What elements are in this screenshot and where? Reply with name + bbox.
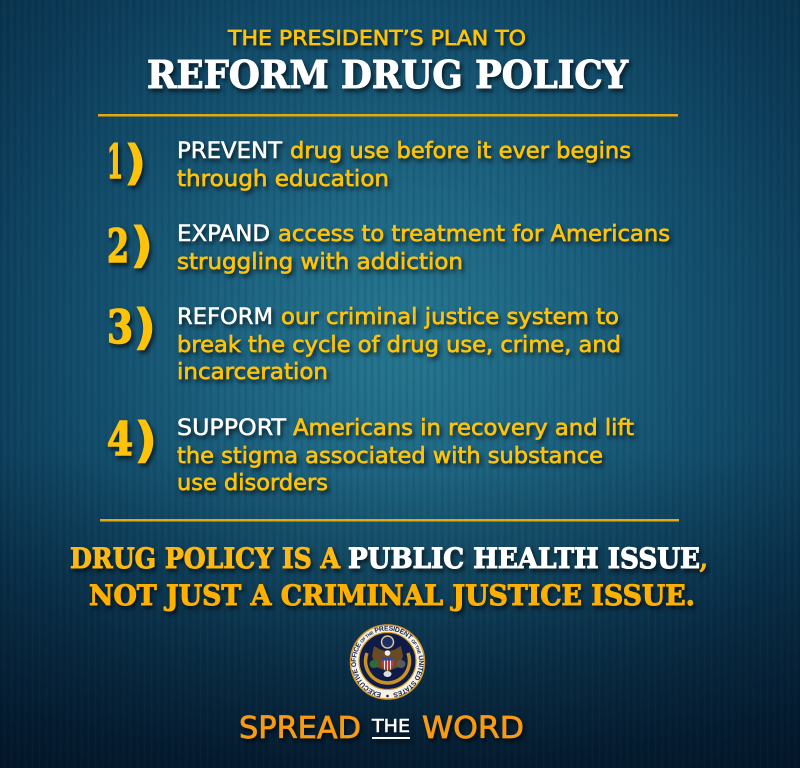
main heading: REFORM DRUG POLICY [147, 52, 629, 97]
item 4: Americans in recovery and lift [293, 415, 634, 441]
item 1: through education [177, 166, 389, 192]
item 4: SUPPORT [177, 415, 286, 441]
closing statement: DRUG POLICY IS A [70, 542, 341, 575]
item 1: drug use before it ever begins [290, 138, 631, 164]
title kicker: THE PRESIDENT’S PLAN TO [227, 26, 526, 50]
item 1: PREVENT [177, 138, 282, 164]
spread the word logo [239, 711, 524, 746]
item 4: the stigma associated with substance [177, 443, 603, 469]
item 1 [107, 135, 631, 192]
item 3: ) [132, 299, 157, 356]
plan list [107, 135, 670, 496]
item 4: use disorders [177, 470, 328, 496]
closing statement: PUBLIC HEALTH ISSUE [348, 542, 700, 575]
item 3: break the cycle of drug use, crime, and [177, 332, 621, 358]
spread the word logo: WORD [422, 711, 524, 746]
item 4: 4 [107, 412, 133, 466]
item 2: 2 [107, 219, 129, 273]
item 3: incarceration [177, 359, 328, 385]
closing statement: , [699, 542, 709, 575]
item 2: EXPAND [177, 221, 270, 247]
closing statement [70, 542, 709, 612]
spread the word logo: THE [371, 716, 410, 737]
item 4 [107, 412, 634, 496]
item 3: our criminal justice system to [281, 304, 619, 330]
item 1: 1 [107, 135, 123, 190]
item 3: 3 [107, 300, 133, 354]
item 1: ) [123, 135, 147, 191]
closing statement: NOT JUST A CRIMINAL JUSTICE ISSUE. [89, 579, 695, 612]
icon: executive office seal: EXECUTIVE OFFICE OF THE PRESIDENT OF THE UNITED STATES [351, 626, 424, 698]
item 2: access to treatment for Americans [278, 221, 670, 247]
item 2: struggling with addiction [177, 249, 463, 275]
item 3 [107, 299, 621, 385]
spread the word logo: SPREAD [239, 711, 361, 746]
item 2: ) [129, 217, 154, 274]
item 2 [107, 217, 670, 275]
title [147, 26, 629, 97]
item 3: REFORM [177, 304, 273, 330]
item 4: ) [133, 412, 158, 469]
